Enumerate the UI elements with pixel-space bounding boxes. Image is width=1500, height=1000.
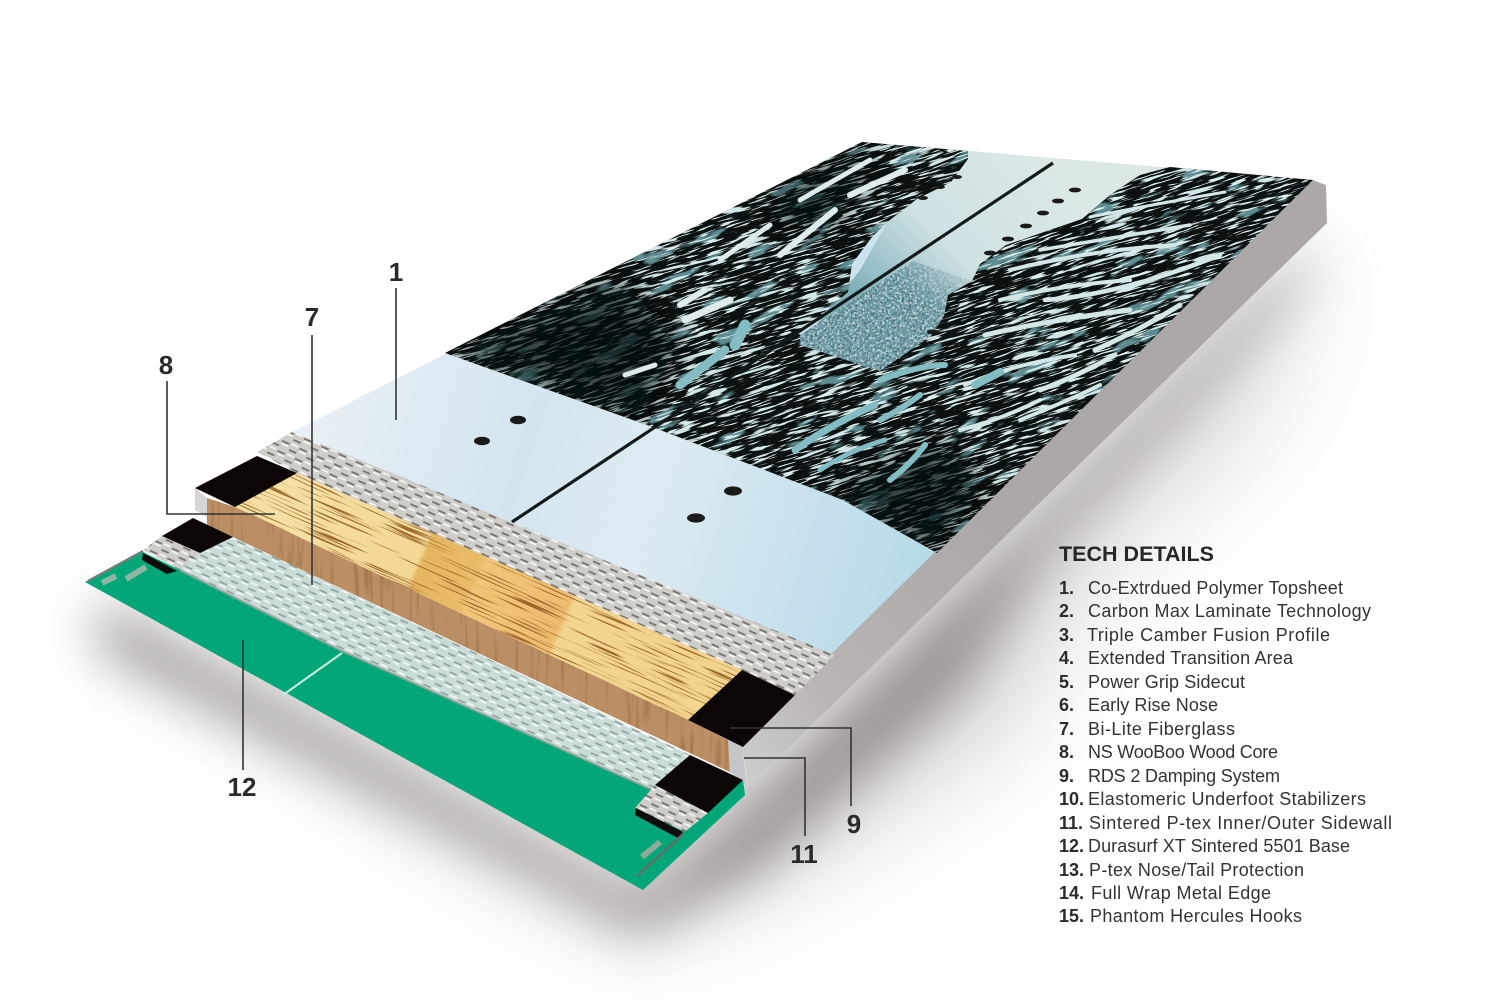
list item 6: 6. [1059,695,1074,715]
right sidewall [728,740,746,785]
clearing between trees [800,148,1175,345]
snow-laden branches, right-hand trees [960,192,1225,430]
base layer green [85,552,745,890]
forest [445,142,1313,553]
callout 8 [159,350,275,514]
list item 6: Early Rise Nose [1088,695,1218,715]
white centre line on base [283,653,342,695]
callout 11 [744,758,818,869]
list item 13: 13. [1059,860,1084,880]
list item 15: Phantom Hercules Hooks [1090,906,1302,926]
list item 2: Carbon Max Laminate Technology [1088,601,1371,621]
fiberglass weave [180,537,690,790]
wood core top [236,473,742,720]
callout 11: 11 [790,839,818,869]
damping pad upper right [688,670,795,747]
callout 7: 7 [305,302,319,332]
damping pad upper left [195,456,297,507]
left sidewall [195,488,207,517]
callout 12: 12 [228,772,256,802]
grey border between fiberglass and base [180,570,653,790]
list item 1: 1. [1059,578,1074,598]
lower weave right [635,785,708,832]
metal edge strip left [88,551,143,581]
heading: TECH DETAILS [1059,542,1214,566]
wood core side [200,490,740,780]
sidewall of the board [743,180,1327,787]
callout 1: 1 [389,257,403,287]
list item 11: Sintered P-tex Inner/Outer Sidewall [1089,813,1392,833]
list item 13: P-tex Nose/Tail Protection [1089,860,1304,880]
tech details panel [1059,542,1392,926]
topsheet graphic: snow and forest [292,142,1313,654]
list item 5: 5. [1059,672,1074,692]
list item 8: 8. [1059,742,1074,762]
callout 8: 8 [159,350,173,380]
list item 1: Co-Extrdued Polymer Topsheet [1088,578,1343,598]
insert holes [474,175,1081,523]
list item 10: 10. [1059,789,1084,809]
list item 5: Power Grip Sidecut [1088,672,1245,692]
darker shaded forest zones [445,150,985,550]
drop shadow [100,230,1320,935]
list item 10: Elastomeric Underfoot Stabilizers [1088,789,1366,809]
list item 12: Durasurf XT Sintered 5501 Base [1088,836,1350,856]
lower weave left [143,536,200,570]
list item 3: 3. [1059,625,1074,645]
carbon laminate weave [257,432,835,695]
centre groove [512,163,1053,522]
list item 7: 7. [1059,719,1074,739]
markings on base nose [102,567,146,583]
list item 15: 15. [1059,906,1084,926]
snowboard cutaway [85,142,1327,890]
callout 9 [730,728,861,839]
list item 4: 4. [1059,648,1074,668]
rubber pad lower right [655,755,743,813]
green wedge beside the tail pad [685,781,745,845]
speckled clearing [800,261,971,371]
list item 3: Triple Camber Fusion Profile [1087,625,1330,645]
metal edge tail insert [635,808,683,838]
list item 4: Extended Transition Area [1088,648,1294,668]
list item 14: 14. [1059,883,1084,903]
list item 2: 2. [1059,601,1074,621]
topsheet base [292,142,1313,655]
list item 9: RDS 2 Damping System [1088,766,1280,786]
list item 7: Bi-Lite Fiberglass [1088,719,1235,739]
list item 8: NS WooBoo Wood Core [1088,742,1278,762]
list item 9: 9. [1059,766,1074,786]
list item 12: 12. [1059,836,1084,856]
metal edge strip right [637,834,683,876]
rubber pad lower left [162,518,233,553]
list item 14: Full Wrap Metal Edge [1091,883,1271,903]
callout 9: 9 [847,809,861,839]
markings on base tail [642,842,660,857]
metal edge nose insert [142,553,177,574]
teal snow branches, lower centre [680,325,1000,480]
white snow patches, left-hand trees [625,160,905,375]
list item 11: 11. [1059,813,1083,833]
